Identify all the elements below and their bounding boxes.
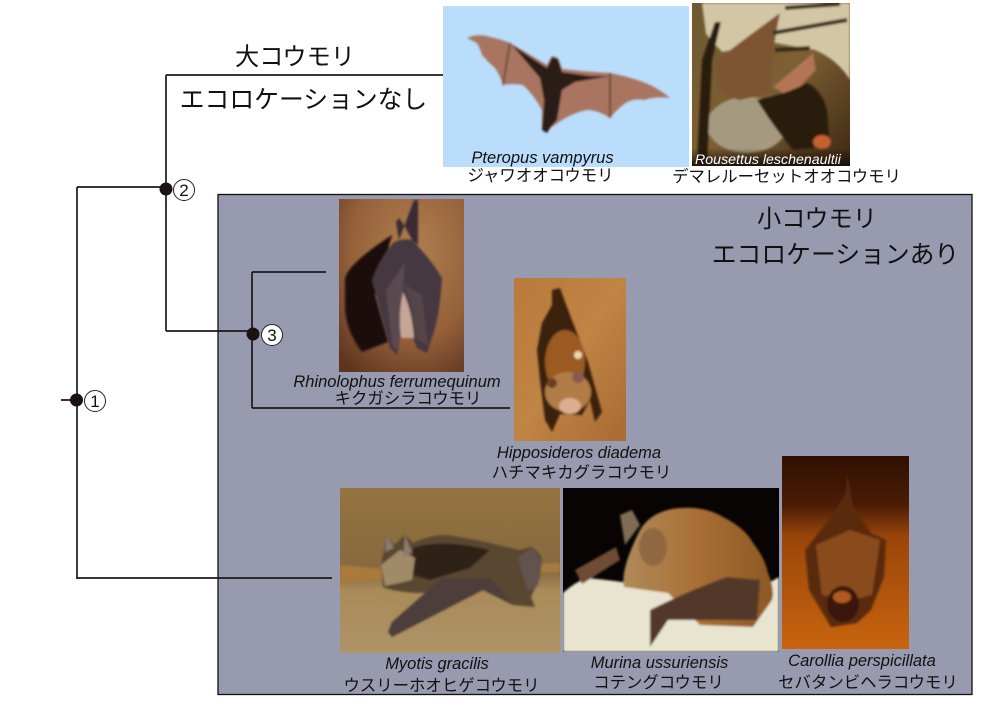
heading: microbats: 小コウモリ — [757, 206, 877, 233]
photo: Myotis gracilis — [340, 488, 560, 653]
node label 3: 3 — [267, 326, 277, 345]
caption: Rhinolophus ferrumequinum: Rhinolophus ferrumequinum — [293, 373, 501, 391]
photo: Hipposideros diadema — [514, 278, 626, 441]
caption: Myotis gracilis: ウスリーホオヒゲコウモリ — [343, 677, 540, 695]
caption: Murina ussuriensis: Murina ussuriensis — [591, 654, 728, 672]
caption: Pteropus vampyrus: Pteropus vampyrus — [471, 149, 614, 167]
heading: megabats — [180, 44, 427, 114]
caption: Myotis gracilis: Myotis gracilis — [385, 655, 489, 673]
heading: microbats: エコロケーションあり — [712, 242, 959, 269]
panel: microbats — [218, 194, 972, 694]
caption: Rousettus leschenaultii: Rousettus leschenaultii — [695, 152, 842, 168]
heading: microbats — [712, 206, 959, 269]
node label 1: 1 — [90, 392, 100, 411]
photo: Murina ussuriensis — [563, 488, 779, 652]
caption: Pteropus vampyrus: ジャワオオコウモリ — [467, 167, 614, 185]
caption: Rousettus leschenaultii — [672, 152, 901, 186]
photo: Rhinolophus ferrumequinum — [339, 199, 464, 372]
caption: Hipposideros diadema: ハチマキカグラコウモリ — [492, 464, 671, 482]
node label 3 — [262, 324, 282, 346]
node label 2: 2 — [179, 181, 189, 200]
node label 2 — [174, 180, 194, 200]
caption: Myotis gracilis — [343, 655, 540, 695]
caption: Carollia perspicillata: Carollia perspicillata — [788, 652, 936, 670]
caption: Carollia perspicillata: セバタンビヘラコウモリ — [778, 674, 958, 692]
photo: Rousettus leschenaultii — [692, 3, 850, 166]
node label 1 — [84, 390, 106, 412]
caption: Hipposideros diadema — [492, 444, 671, 482]
caption: Rhinolophus ferrumequinum: キクガシラコウモリ — [335, 390, 481, 408]
caption: Carollia perspicillata — [778, 652, 958, 692]
photo: Carollia perspicillata — [782, 456, 909, 649]
photo: Pteropus vampyrus — [443, 6, 689, 167]
caption: Murina ussuriensis: コテングコウモリ — [593, 674, 724, 692]
phylogenetic tree — [61, 75, 510, 579]
caption: Hipposideros diadema: Hipposideros diadema — [497, 444, 661, 462]
caption: Pteropus vampyrus — [467, 149, 614, 185]
heading: megabats: 大コウモリ — [235, 44, 355, 71]
caption: Rhinolophus ferrumequinum — [293, 373, 501, 408]
heading: megabats: エコロケーションなし — [180, 87, 427, 114]
caption: Murina ussuriensis — [591, 654, 728, 692]
caption: Rousettus leschenaultii: デマレルーセットオオコウモリ — [672, 167, 901, 186]
